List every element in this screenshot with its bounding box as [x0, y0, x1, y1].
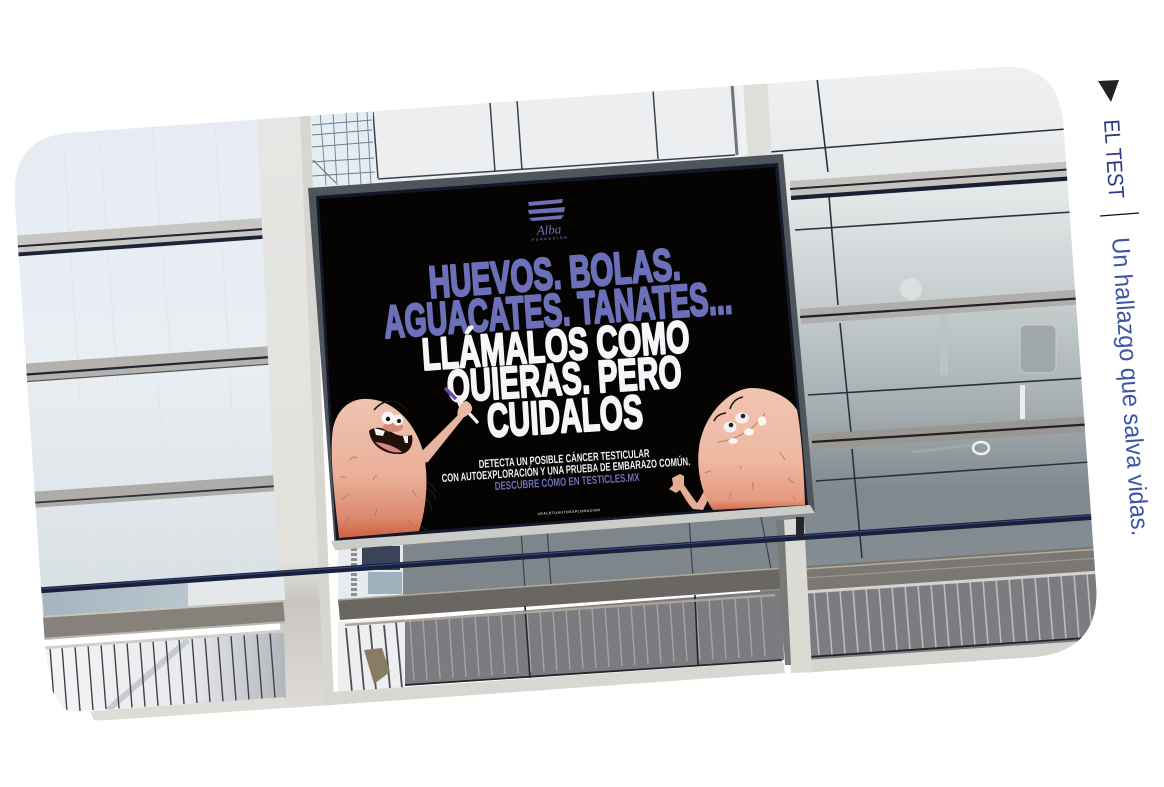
left body hairs	[340, 457, 417, 526]
background: left glass wall	[14, 120, 278, 620]
background: right glass wall	[760, 50, 1120, 610]
left arm	[421, 413, 464, 463]
support post under billboard	[776, 518, 812, 673]
window beam: left middle	[20, 346, 272, 382]
hashtag: #DALETUAUTOEXPLORACION	[538, 508, 600, 516]
billboard	[308, 154, 815, 550]
left egg body	[332, 399, 426, 538]
left hand	[457, 401, 472, 418]
bracket beam: lower right	[805, 546, 1100, 592]
glass joints and reflections	[64, 78, 1090, 600]
bracket beam: centre	[338, 568, 788, 620]
bracket beam: lower left	[40, 600, 285, 640]
window beam: right upper	[790, 161, 1076, 198]
stray hairs	[418, 480, 436, 530]
divider between labels	[1100, 213, 1139, 216]
right eyebrows	[714, 397, 743, 421]
right body hairs	[705, 452, 795, 500]
right eyes	[724, 412, 749, 432]
logo wordmark: Alba	[535, 221, 562, 238]
billboard frame inner dark edge	[316, 163, 808, 541]
right teeth	[728, 416, 766, 444]
rail bracket	[796, 517, 804, 537]
pregnancy test stick	[445, 388, 478, 423]
section label: EL TEST: EL TEST	[1099, 119, 1129, 199]
left nose	[383, 422, 403, 432]
window beam: left upper	[10, 218, 263, 255]
section subtitle: Un hallazgo que salva vidas.	[1106, 237, 1154, 537]
headline line 4: QUIERAS. PERO	[445, 346, 683, 412]
left tongue	[375, 442, 402, 453]
handrail	[30, 514, 1105, 591]
pillar: main column	[257, 113, 334, 709]
body copy	[441, 447, 691, 516]
pillar: upper right column	[744, 84, 772, 156]
character: left testicle	[332, 388, 478, 538]
body line 1: DETECTA UN POSIBLE CÁNCER TESTICULAR	[478, 447, 650, 471]
left teeth	[374, 428, 408, 443]
right egg body	[698, 388, 805, 510]
billboard bottom light ledge	[331, 505, 815, 550]
body line 3 link: DESCUBRE CÓMO EN TESTICLES.MX	[494, 471, 640, 493]
icon: black triangle marker	[1098, 80, 1119, 102]
billboard black screen	[319, 167, 805, 537]
logo bars	[528, 199, 565, 221]
lower left glass strip	[42, 575, 285, 616]
headline line 2: AGUACATES. TANATES...	[382, 271, 734, 348]
railing: left section	[44, 631, 286, 722]
glass reflections: right side	[900, 278, 1056, 454]
headline line 5: CUIDALOS	[485, 385, 644, 447]
right arm and hand	[669, 474, 708, 510]
window beam: right lower	[812, 416, 1096, 449]
wire grid window	[310, 108, 375, 186]
railing: centre section	[333, 590, 785, 705]
billboard frame	[308, 154, 815, 550]
window beam: left lower	[30, 475, 278, 508]
left mouth	[369, 428, 412, 454]
headline line 1: HUEVOS. BOLAS.	[427, 238, 682, 308]
window beam: right middle	[800, 289, 1086, 324]
left eyes	[382, 412, 404, 426]
background: upper glass band	[313, 85, 744, 188]
railing: right section	[805, 572, 1100, 674]
headline line 3: LLÁMALOS COMO	[420, 311, 691, 380]
under-billboard window panel	[338, 510, 786, 605]
right mouth	[718, 413, 765, 442]
headline	[384, 248, 732, 438]
body line 2: CON AUTOEXPLORACIÓN Y UNA PRUEBA DE EMBARAZO COMÚN.	[441, 455, 691, 485]
logo: Fundación de Alba	[528, 199, 567, 242]
logo small label: FUNDACIÓN	[532, 235, 567, 242]
left hair	[374, 401, 408, 411]
character: right testicle	[669, 388, 805, 510]
